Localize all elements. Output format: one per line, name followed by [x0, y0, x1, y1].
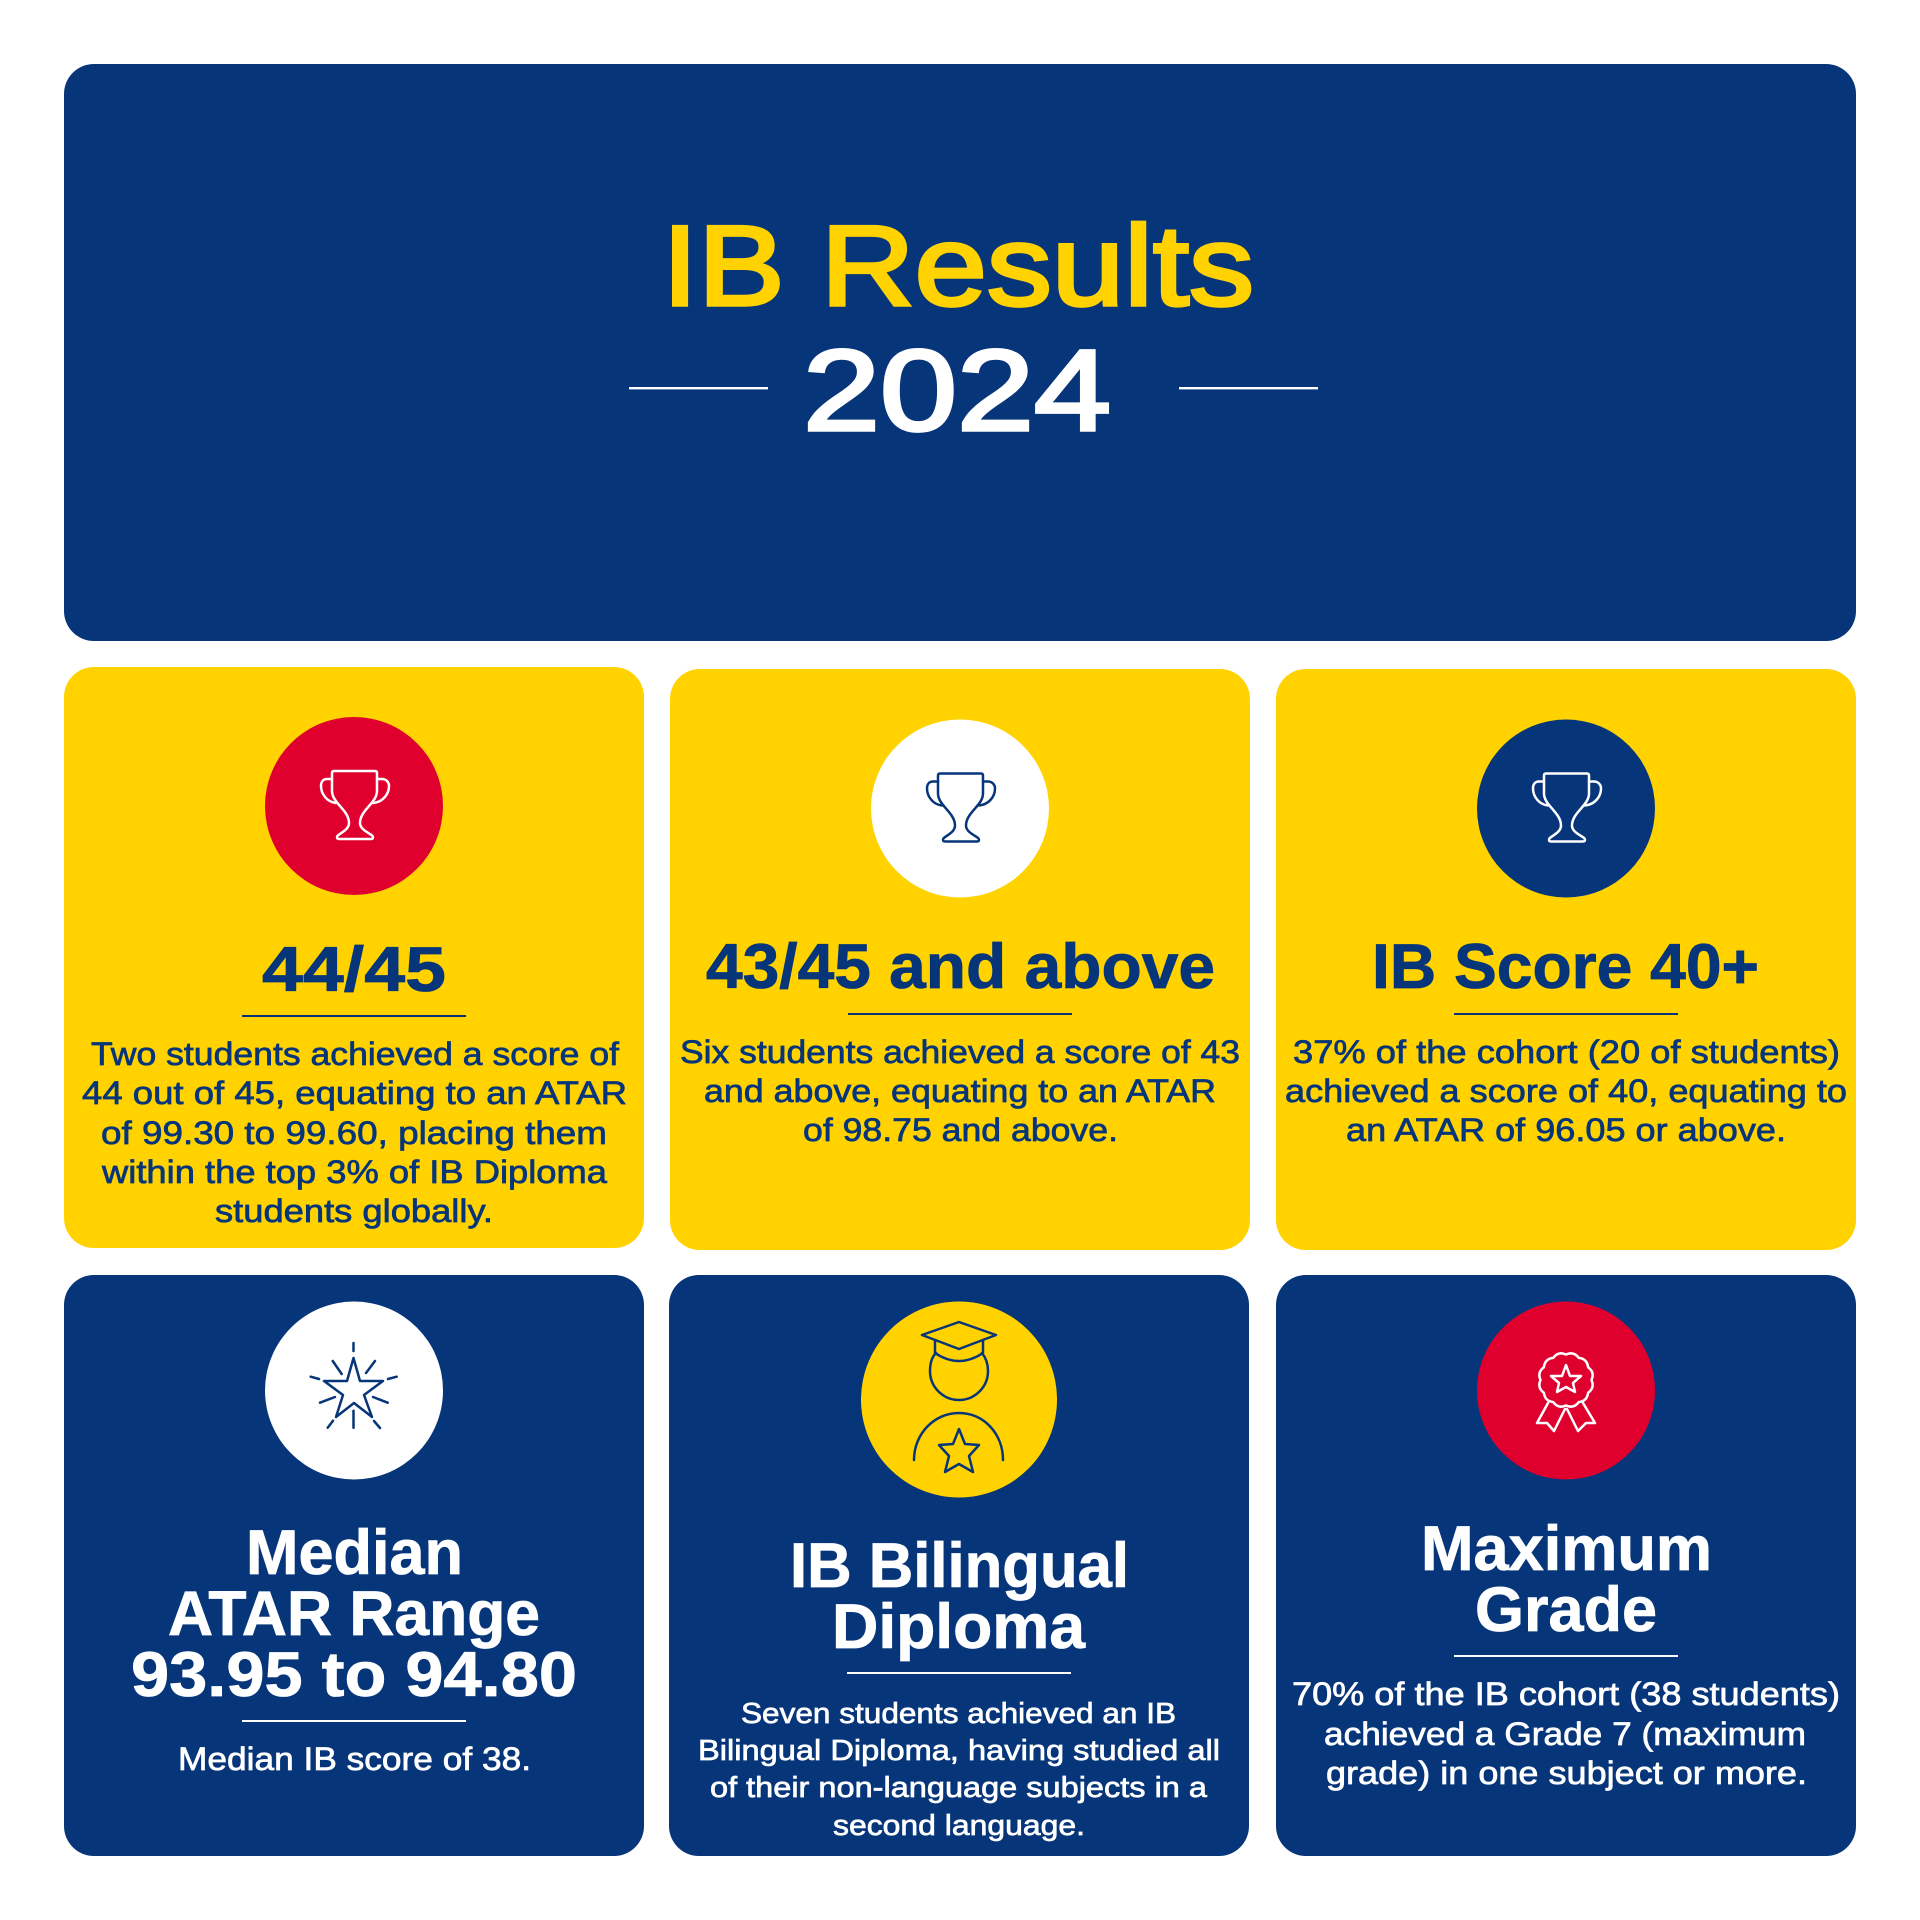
- body text: and above, equating to an ATAR: [704, 1073, 1216, 1109]
- heading: 44/45: 44/45: [262, 935, 446, 1005]
- heading: Maximum Grade: Maximum: [1421, 1514, 1712, 1584]
- heading: Maximum Grade: [1421, 1514, 1712, 1645]
- heading: IB Bilingual Diploma: [790, 1531, 1129, 1662]
- body text: achieved a Grade 7 (maximum: [1324, 1716, 1806, 1752]
- header panel: [64, 64, 1856, 641]
- panel: Maximum Grade: [1276, 1275, 1856, 1856]
- heading: IB Bilingual Diploma: IB Bilingual: [790, 1531, 1129, 1601]
- body text: grade) in one subject or more.: [1326, 1755, 1807, 1791]
- body text: Seven students achieved an IB: [741, 1698, 1176, 1730]
- body text: [680, 1034, 1240, 1148]
- subtitle: 2024: 2024: [803, 327, 1111, 455]
- body text: [82, 1036, 627, 1229]
- heading: 43/45 and above: 43/45 and above: [706, 932, 1215, 1002]
- heading: Median ATAR Range 93.95 to 94.80: ATAR Range: [168, 1579, 540, 1649]
- body text: of 99.30 to 99.60, placing them: [101, 1115, 607, 1151]
- heading: Median ATAR Range 93.95 to 94.80: Median: [246, 1518, 463, 1588]
- body text: Median IB score of 38.: [178, 1741, 531, 1777]
- body text: 44 out of 45, equating to an ATAR: [82, 1075, 627, 1111]
- icon: trophy on navy circle: [1477, 720, 1655, 898]
- icon: trophy on red circle: [265, 717, 443, 895]
- body text: 70% of the IB cohort (38 students): [1292, 1676, 1840, 1712]
- icon: award rosette on red circle: [1477, 1302, 1655, 1480]
- panel: Median ATAR Range: [64, 1275, 644, 1856]
- body text: [1292, 1676, 1840, 1791]
- panel: 44/45: [64, 667, 644, 1248]
- body text: within the top 3% of IB Diploma: [101, 1154, 607, 1190]
- heading: Median ATAR Range 93.95 to 94.80: 93.95 to 94.80: [131, 1640, 577, 1710]
- icon: graduate with star on yellow circle: [861, 1302, 1057, 1498]
- body text: second language.: [833, 1810, 1085, 1842]
- panel: 43/45 and above: [670, 669, 1250, 1250]
- body text: Six students achieved a score of 43: [680, 1034, 1240, 1070]
- heading: IB Bilingual Diploma: Diploma: [832, 1592, 1086, 1662]
- title: IB Results: IB Results: [662, 203, 1254, 330]
- body text: 37% of the cohort (20 of students): [1293, 1034, 1840, 1070]
- body text: Bilingual Diploma, having studied all: [698, 1735, 1220, 1767]
- body text: [1285, 1034, 1847, 1148]
- body text: students globally.: [215, 1193, 493, 1229]
- panel: IB Score 40+: [1276, 669, 1856, 1250]
- panel: IB Bilingual Diploma: [669, 1275, 1249, 1856]
- heading: Median ATAR Range 93.95 to 94.80: [131, 1518, 577, 1710]
- body text: achieved a score of 40, equating to: [1285, 1073, 1847, 1109]
- body text: an ATAR of 96.05 or above.: [1346, 1112, 1786, 1148]
- heading: Maximum Grade: Grade: [1475, 1575, 1657, 1645]
- body text: Two students achieved a score of: [91, 1036, 619, 1072]
- icon: trophy on white circle: [871, 720, 1049, 898]
- body text: of 98.75 and above.: [803, 1112, 1118, 1148]
- icon: star with rays on white circle: [265, 1302, 443, 1480]
- body text: [698, 1698, 1220, 1842]
- heading: IB Score 40+: IB Score 40+: [1372, 932, 1759, 1002]
- body text: of their non-language subjects in a: [710, 1772, 1208, 1804]
